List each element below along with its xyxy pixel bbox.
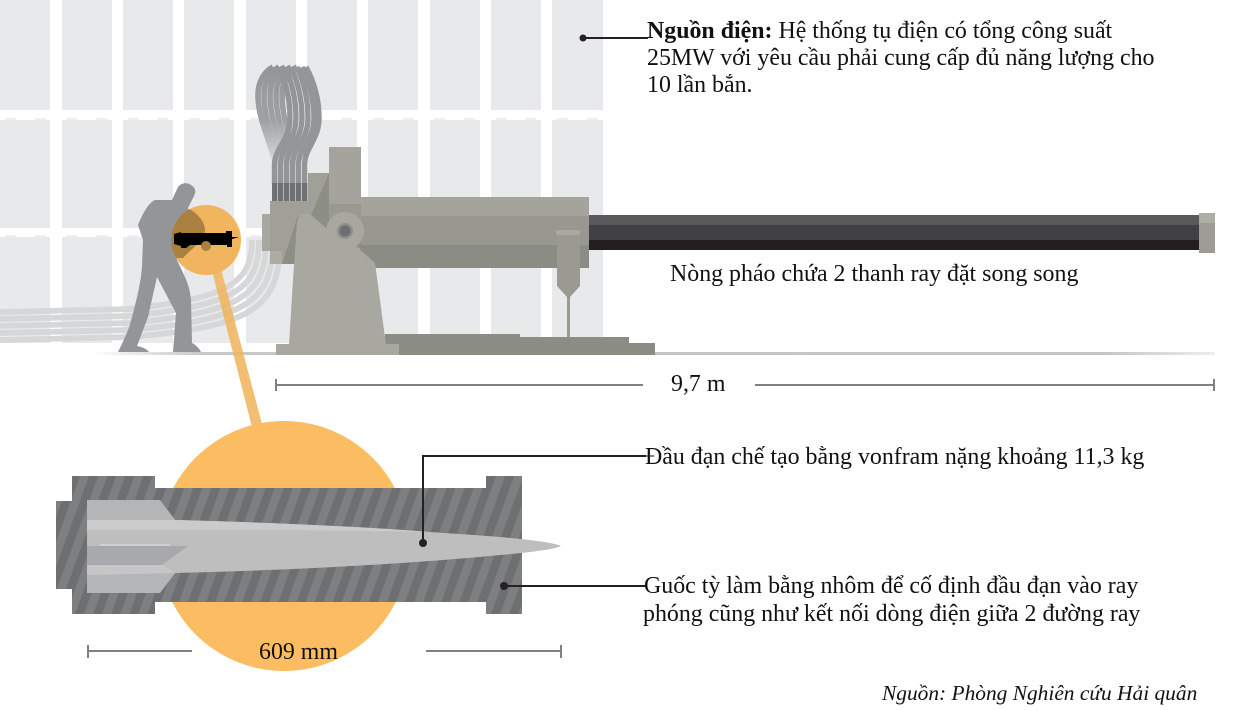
sabot (56, 476, 522, 614)
rear cable bundle (258, 67, 297, 165)
projectile caption: Đầu đạn chế tạo bằng vonfram nặng khoảng 11,3 kg (645, 444, 1144, 470)
power source text: 25MW với yêu cầu phải cung cấp đủ năng lượng cho (647, 45, 1155, 71)
pivot (326, 212, 364, 250)
barrel (589, 215, 1200, 250)
projectile (87, 500, 561, 593)
gun housing (360, 197, 589, 268)
pedestal (276, 214, 399, 355)
power source text: 10 lần bắn. (647, 72, 752, 98)
breech block (262, 147, 361, 264)
source note: Nguồn: Phòng Nghiên cứu Hải quân (881, 681, 1197, 705)
barrel caption: Nòng pháo chứa 2 thanh ray đặt song song (670, 261, 1078, 287)
cable connectors (272, 183, 307, 201)
mini pivot (201, 241, 211, 251)
magnifier circle (165, 205, 241, 275)
fins (87, 500, 176, 593)
inner fin (87, 546, 188, 565)
recoil strut (556, 230, 580, 337)
floor cables (0, 240, 280, 340)
human figure (118, 183, 201, 352)
base plates (385, 334, 655, 355)
enlarged circle (159, 421, 409, 671)
dimension label: 609 mm (259, 639, 338, 665)
length label: 9,7 m (671, 371, 726, 397)
power source text: Nguồn điện: Hệ thống tụ điện có tổng công suất (647, 18, 1112, 44)
sabot caption: Guốc tỳ làm bằng nhôm để cố định đầu đạn vào ray (644, 573, 1138, 599)
mini railgun (174, 231, 239, 248)
capacitor bank background grid (0, 0, 603, 343)
lower strip (87, 565, 176, 575)
muzzle (1199, 213, 1215, 253)
projectile body (87, 520, 561, 575)
front cable bundle (274, 67, 319, 184)
figure overlap (171, 209, 205, 258)
ground line (90, 352, 1215, 355)
sabot leader (500, 582, 646, 590)
projectile leader (419, 456, 646, 547)
sabot caption: phóng cũng như kết nối dòng điện giữa 2 đường ray (643, 601, 1140, 627)
fin highlight (100, 544, 170, 546)
zoom connector bar (212, 269, 262, 427)
power source leader (580, 34, 648, 42)
highlight (87, 520, 430, 532)
